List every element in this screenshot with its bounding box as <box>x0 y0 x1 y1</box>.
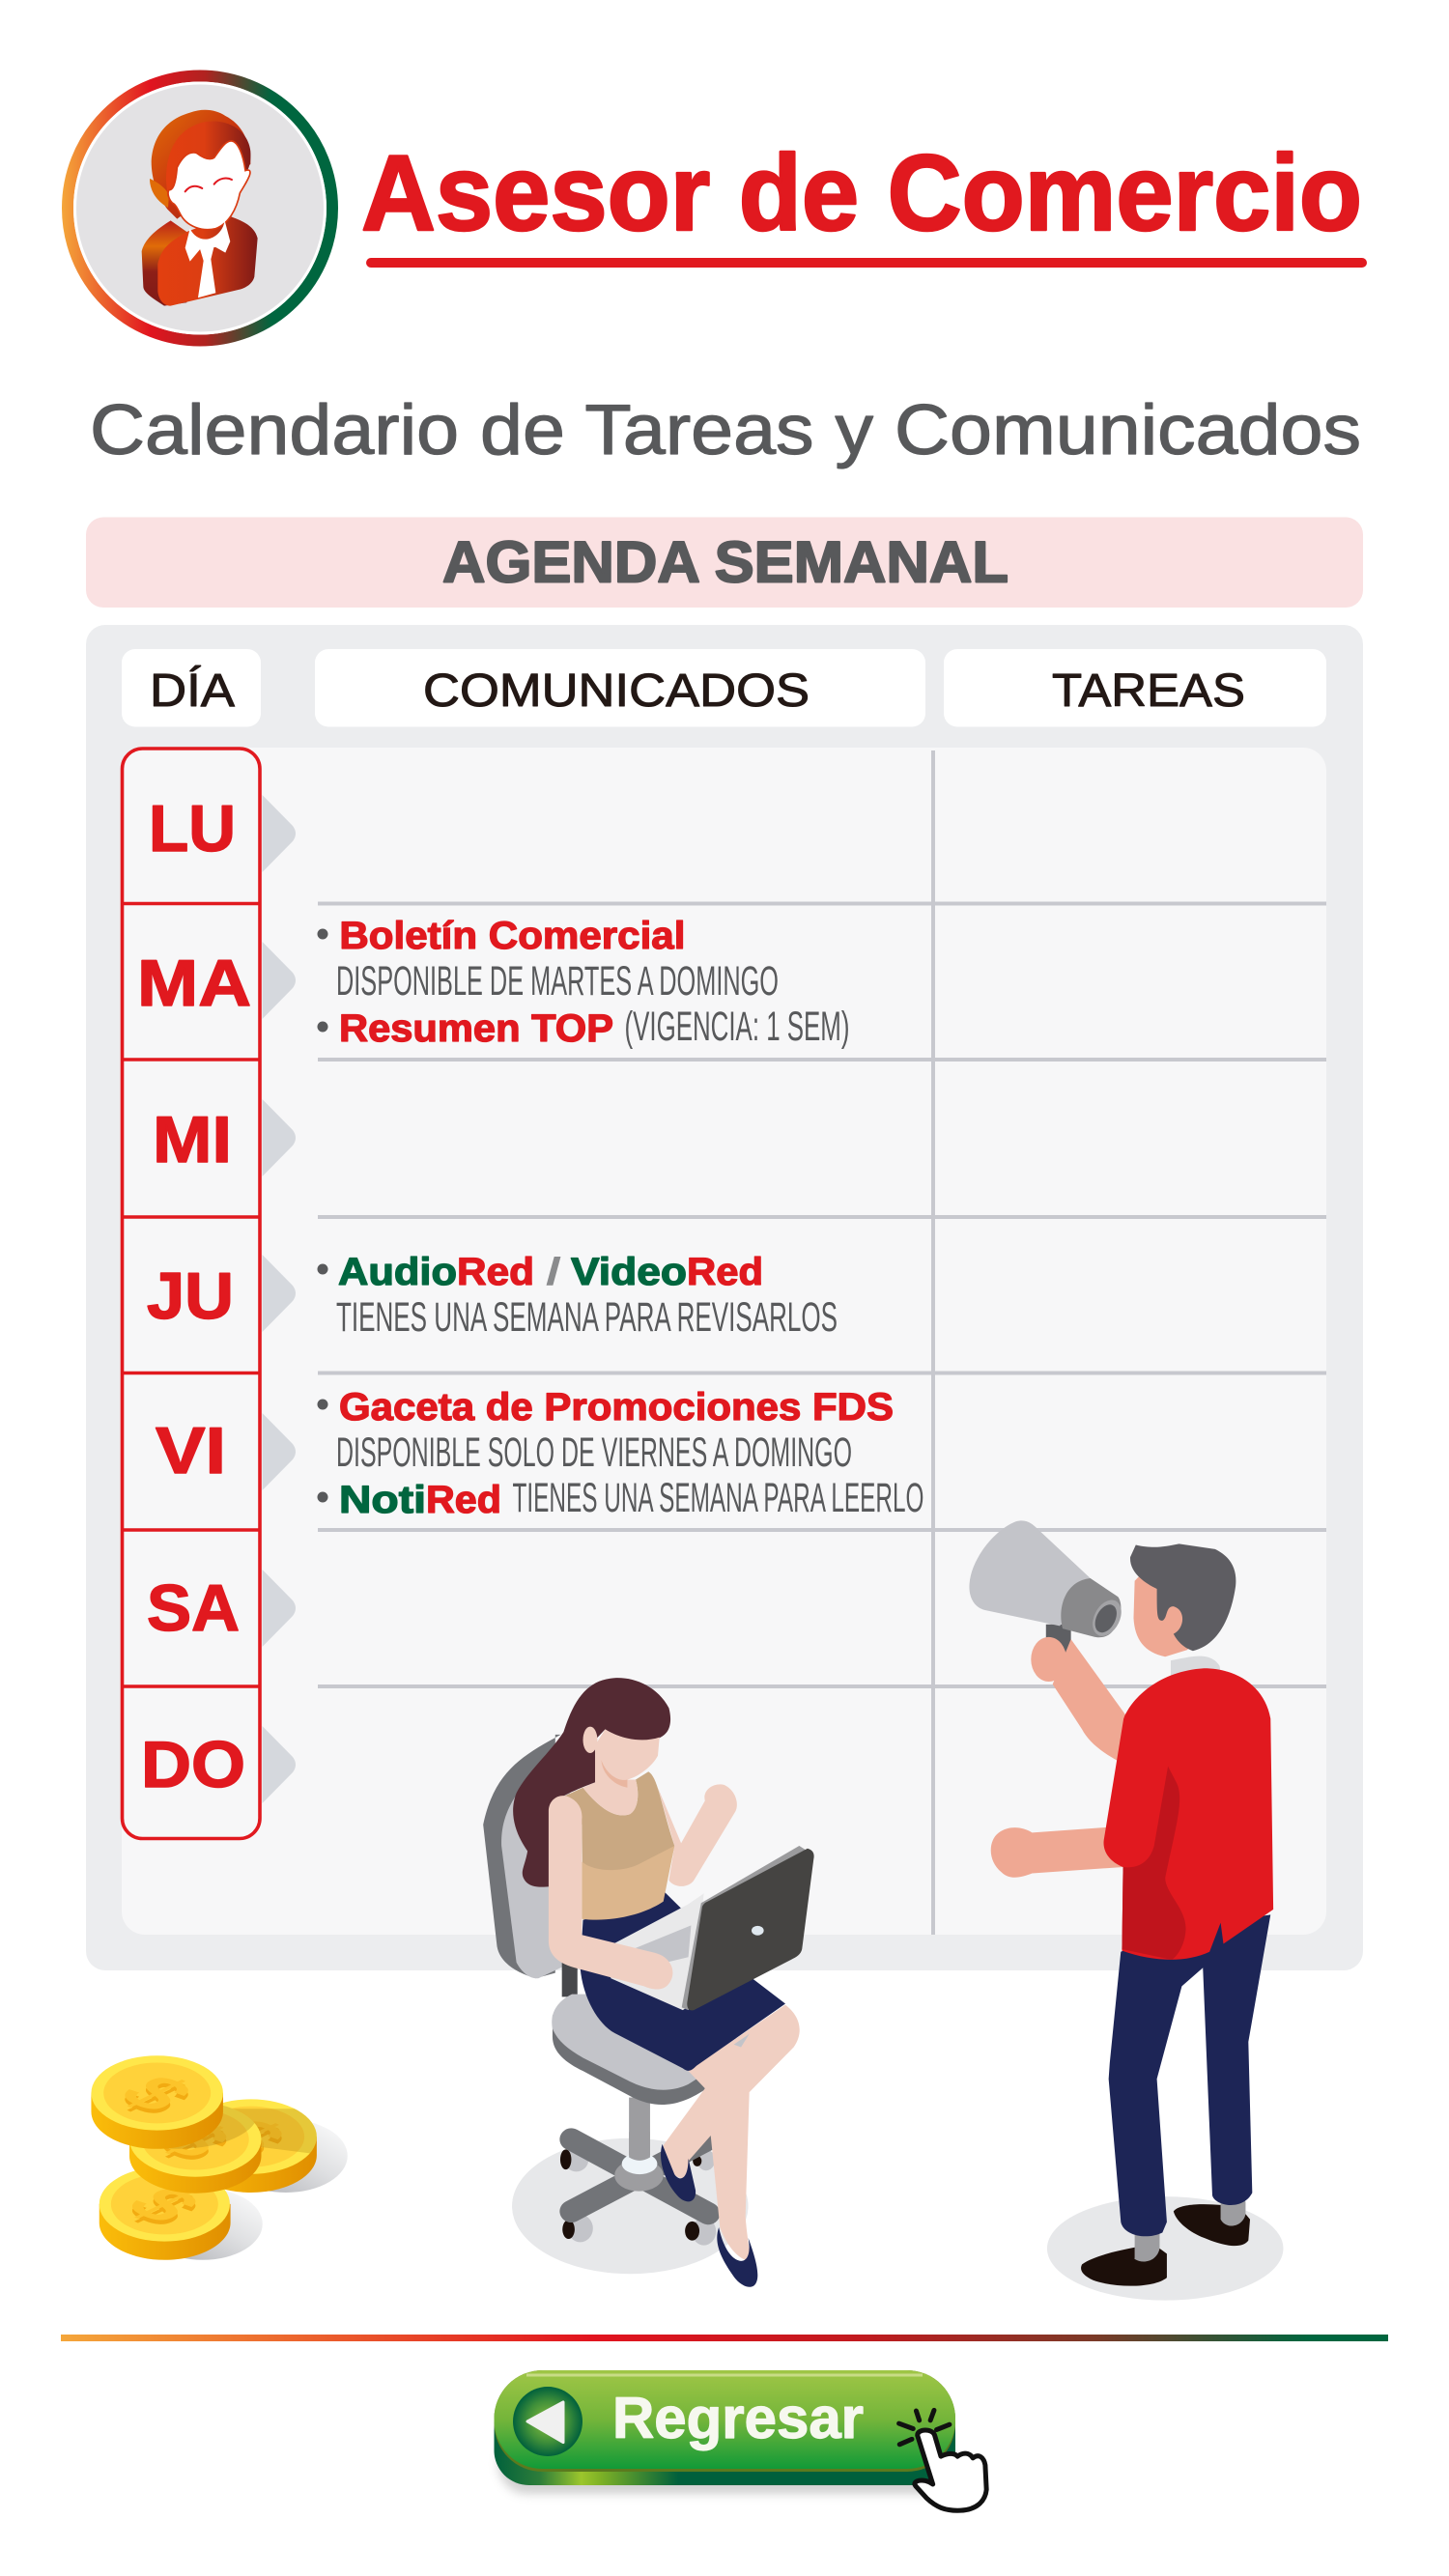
panel: weekly calendar background <box>86 625 1363 1970</box>
illustration: man with megaphone <box>969 1520 1283 2301</box>
text block: viernes: Noti <box>339 1479 426 1521</box>
coin: middle: $ <box>138 2117 250 2171</box>
header: tareas: TAREAS <box>1052 665 1245 717</box>
day column: SA <box>147 1571 240 1645</box>
icon: advisor avatar badge <box>68 75 332 340</box>
day column <box>122 749 260 1839</box>
coin: top <box>91 2055 223 2149</box>
subtitle: Calendario de Tareas y Comunicados <box>90 391 1361 469</box>
coin: bottom left <box>99 2166 231 2260</box>
text block: martes: DISPONIBLE DE MARTES A DOMINGO <box>336 958 779 1005</box>
header: comunicados: COMUNICADOS <box>423 665 810 717</box>
button: regresar: Regresar <box>612 2386 864 2450</box>
text block: martes <box>317 915 850 1050</box>
day column: MA <box>137 947 251 1020</box>
illustration: woman with laptop on office chair <box>483 1678 814 2287</box>
text block: viernes <box>317 1386 923 1521</box>
text block: jueves: Red <box>457 1251 534 1293</box>
icon: gold coins <box>91 2055 348 2260</box>
coin: middle <box>129 2106 261 2194</box>
coin: bottom left: $ <box>107 2182 219 2236</box>
text block: jueves: Audio <box>338 1251 457 1293</box>
banner: agenda semanal <box>86 518 1363 608</box>
text block: viernes: Red <box>426 1479 501 1521</box>
text block: jueves <box>317 1251 838 1341</box>
text block: martes: (VIGENCIA: 1 SEM) <box>624 1004 850 1050</box>
text block: jueves: / <box>546 1251 561 1293</box>
coin: top: $ <box>100 2066 213 2120</box>
icon: pointing hand with click rays <box>899 2410 986 2510</box>
header: comunicados <box>315 649 925 726</box>
text block: viernes: DISPONIBLE SOLO DE VIERNES A DOMINGO <box>336 1430 852 1476</box>
coin: back <box>222 2099 317 2193</box>
title underline <box>366 258 1367 268</box>
day column: JU <box>147 1260 234 1333</box>
coin: top: $ <box>100 2071 213 2125</box>
day column: DO <box>141 1728 245 1801</box>
text block: jueves: Red <box>687 1251 763 1293</box>
banner: agenda semanal: AGENDA SEMANAL <box>442 529 1009 595</box>
coin: middle: $ <box>138 2112 250 2167</box>
text block: martes: Resumen TOP <box>339 1007 613 1050</box>
header: tareas <box>944 649 1326 726</box>
day column: MI <box>153 1103 232 1176</box>
day column: LU <box>149 792 236 865</box>
coin: back: $ <box>194 2114 306 2168</box>
button: regresar <box>495 2370 955 2494</box>
icon: back arrow <box>513 2387 582 2456</box>
panel: calendar grid <box>122 748 1326 1935</box>
text block: jueves: Video <box>571 1251 687 1293</box>
coin: back: $ <box>194 2110 306 2165</box>
text block: martes: Boletín Comercial <box>339 915 685 957</box>
text block: viernes: Gaceta de Promociones FDS <box>339 1386 894 1429</box>
day column: VI <box>156 1414 226 1487</box>
title: Asesor de Comercio <box>361 133 1362 253</box>
text block: jueves: TIENES UNA SEMANA PARA REVISARLOS <box>336 1294 838 1341</box>
text block: viernes: TIENES UNA SEMANA PARA LEERLO <box>512 1475 923 1521</box>
header: día: DÍA <box>150 665 235 717</box>
header: día <box>122 649 261 726</box>
divider: gradient line <box>61 2335 1388 2341</box>
coin: bottom left: $ <box>107 2177 219 2231</box>
arrows: day pointers <box>263 795 296 1803</box>
